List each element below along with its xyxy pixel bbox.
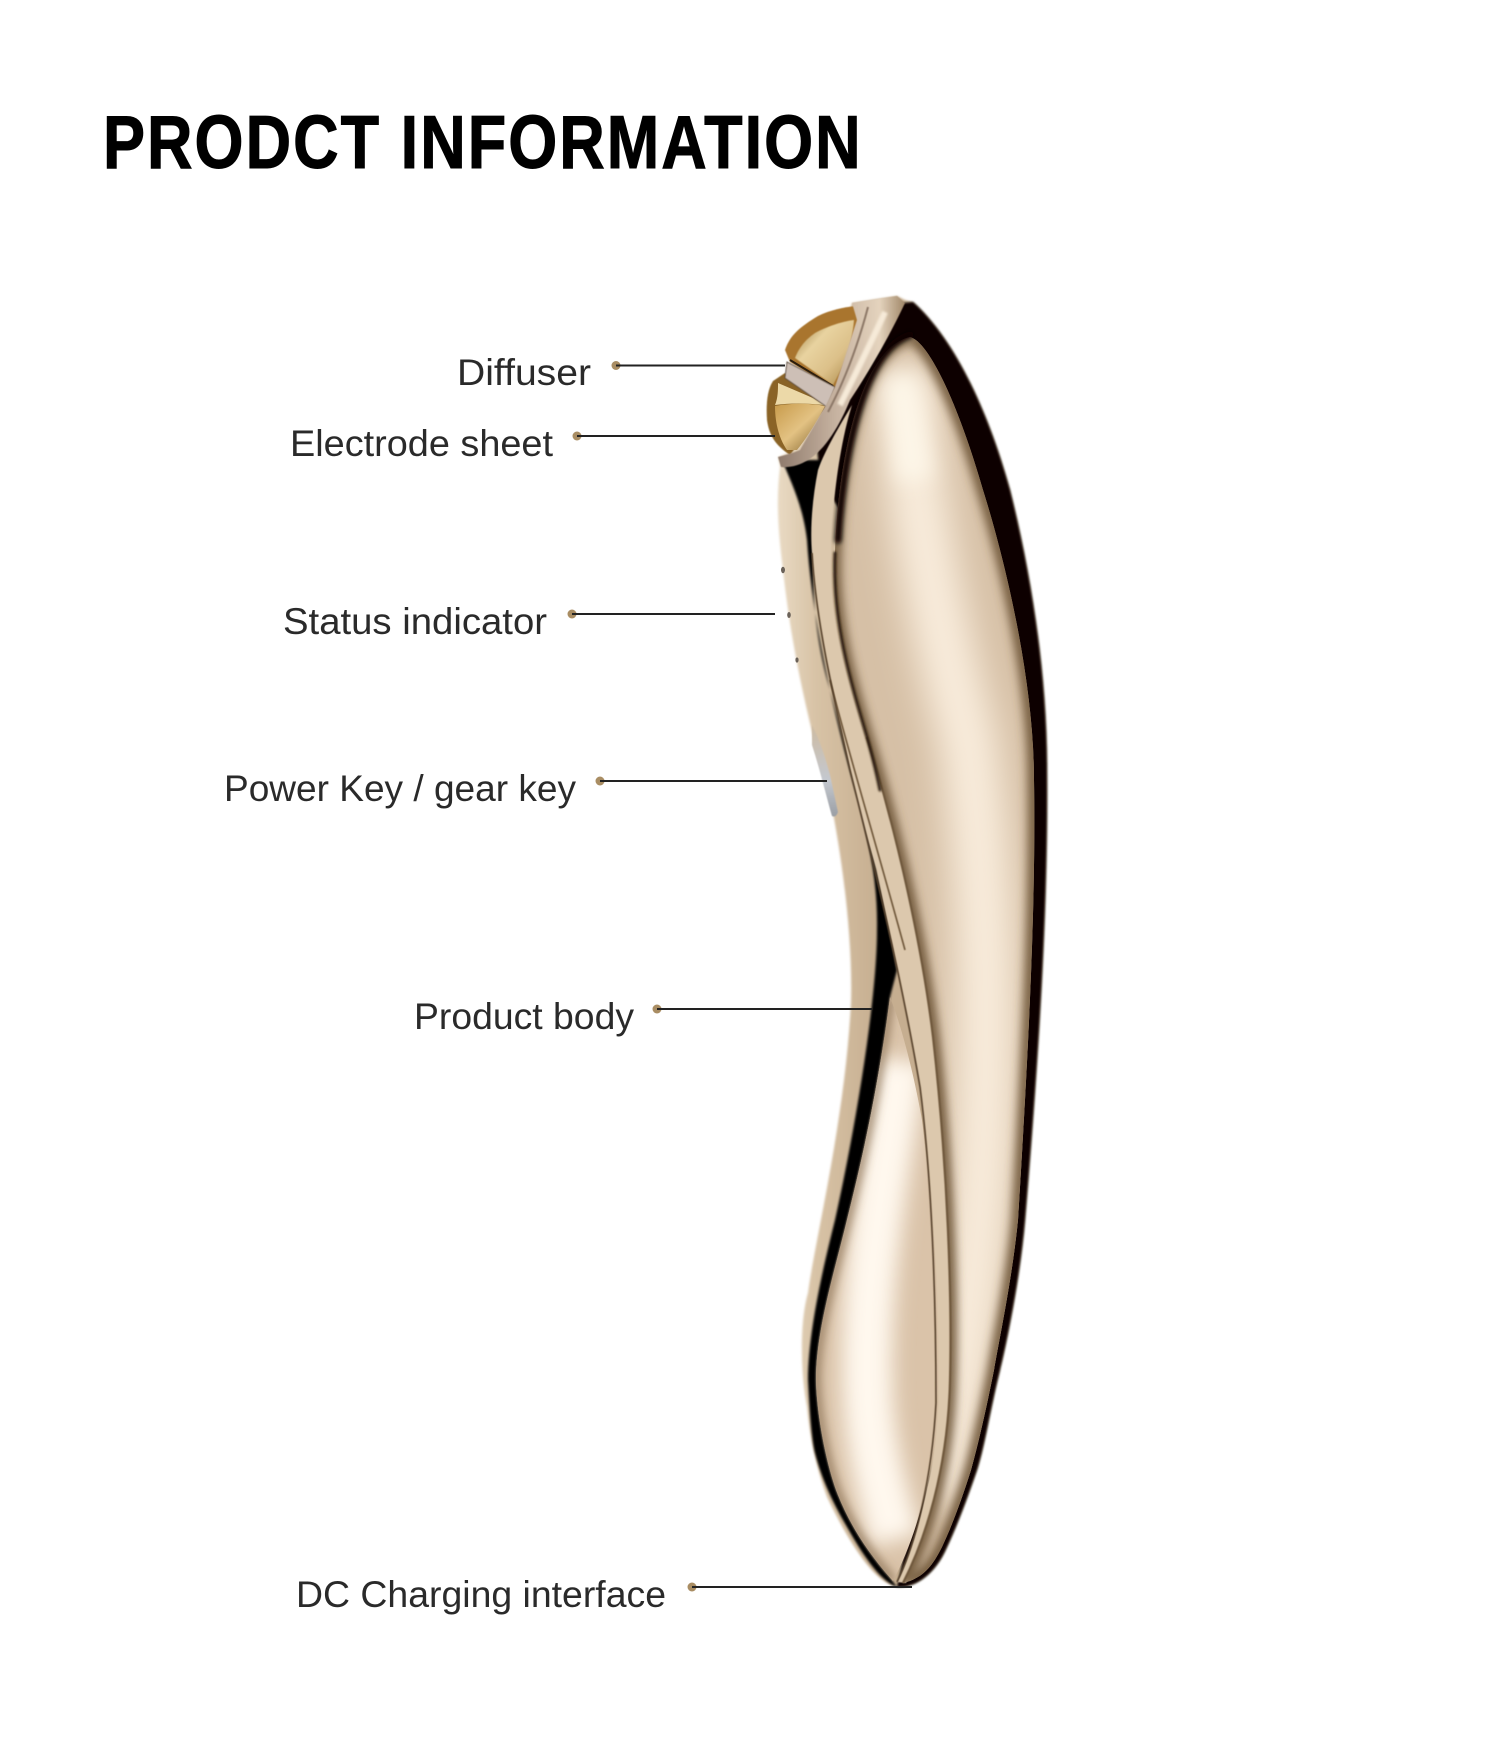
ridge band along the seam xyxy=(811,405,952,1583)
upper gold electrode dome xyxy=(785,306,858,390)
callout: Status indicator xyxy=(283,601,775,642)
callout: DC Charging interface xyxy=(296,1574,912,1615)
callout: Power Key / gear key xyxy=(224,768,827,809)
power key xyxy=(812,725,838,816)
status indicator dots xyxy=(781,567,799,663)
dark wedge on the back of the body xyxy=(782,460,897,1587)
lower gold electrode dome xyxy=(767,373,826,455)
seam lines xyxy=(830,680,905,950)
callout: Diffuser: Diffuser xyxy=(457,352,591,393)
callout: Product body: Product body xyxy=(414,996,634,1037)
black outline along top of main panel xyxy=(838,335,910,540)
head collar band xyxy=(778,296,905,467)
title: PRODCT INFORMATION xyxy=(103,100,861,184)
callout: Electrode sheet: Electrode sheet xyxy=(290,423,554,464)
callout: Product body xyxy=(414,996,872,1037)
main right panel xyxy=(830,330,1040,1590)
callout: Diffuser xyxy=(457,352,785,393)
black reflection right of seam xyxy=(817,302,1047,1587)
device body silhouette xyxy=(778,296,1047,1587)
callout: Status indicator: Status indicator xyxy=(283,601,547,642)
callout: Electrode sheet xyxy=(290,423,775,464)
callout: DC Charging interface: DC Charging interface xyxy=(296,1574,666,1615)
product illustration: beauty device xyxy=(767,296,1047,1600)
callout: Power Key / gear key: Power Key / gear key xyxy=(224,768,576,809)
lower left panel xyxy=(816,997,938,1581)
diffuser strip xyxy=(785,362,835,407)
